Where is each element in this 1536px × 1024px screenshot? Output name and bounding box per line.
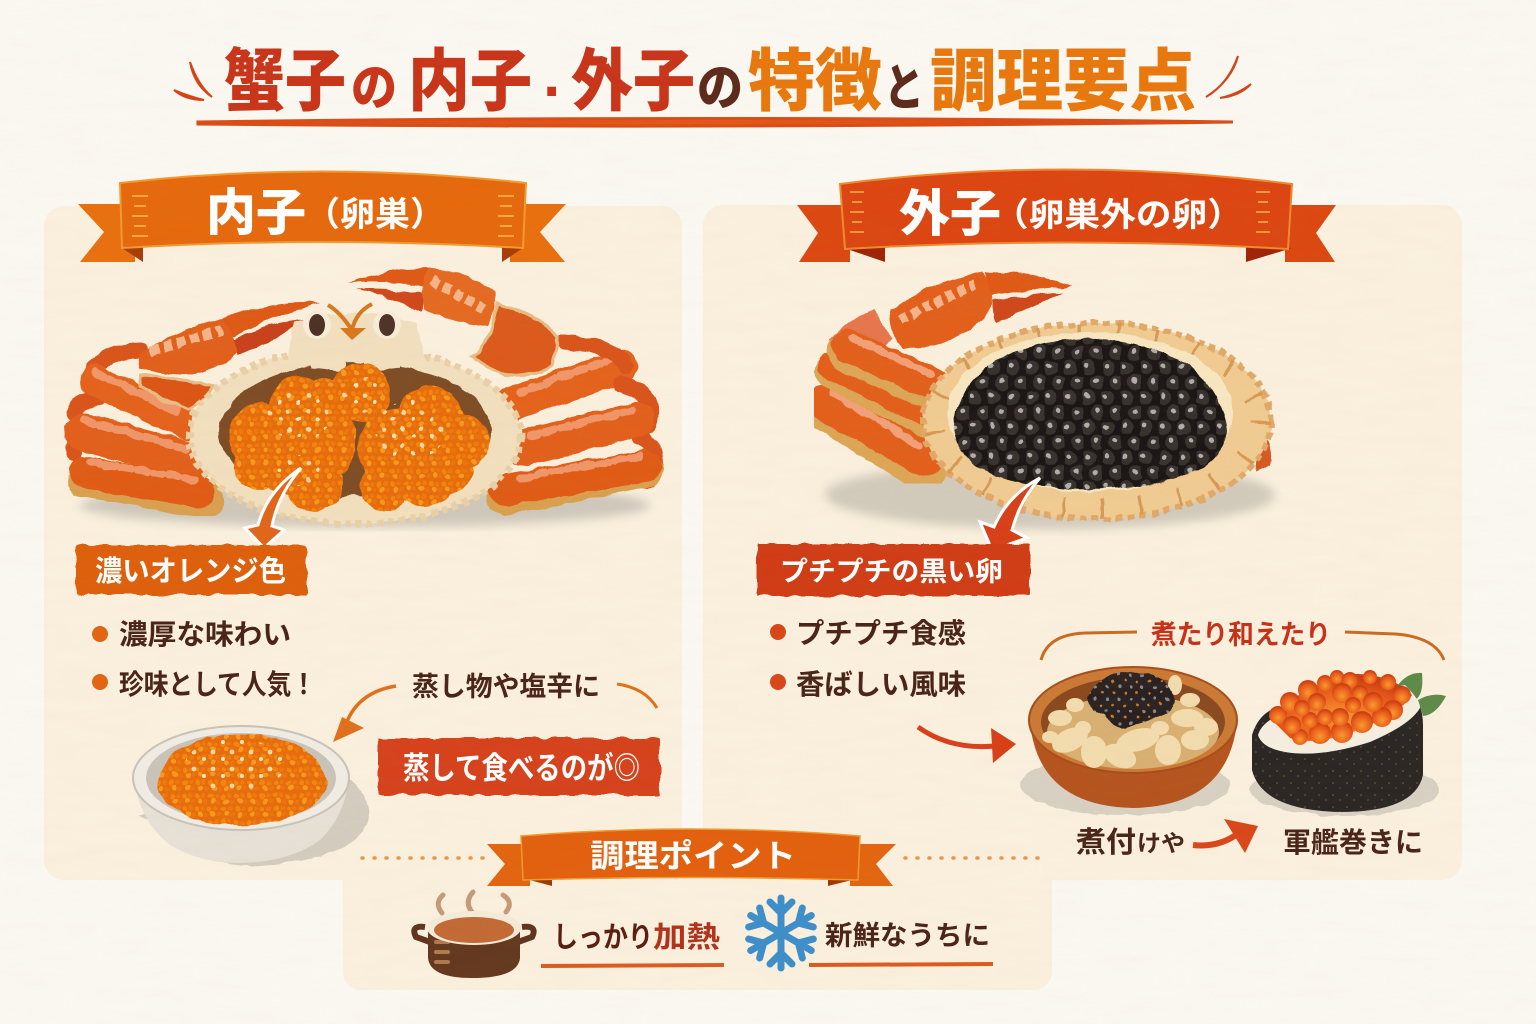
banner: 蒸して食べるのが◎: 蒸して食べるのが◎ <box>403 751 640 786</box>
label: 煮たり和えたり with bracket: 煮たり和えたり <box>1151 620 1331 650</box>
claw <box>830 272 1072 348</box>
dotted line left <box>362 856 486 860</box>
illustration: crab with orange roe <box>74 268 654 548</box>
bullets: inner roe <box>92 619 316 700</box>
icon: pot <box>414 892 534 978</box>
orange roe <box>229 363 490 511</box>
legs <box>825 338 935 470</box>
label: 煮付けや <box>1076 826 1185 859</box>
illustration: crab with black roe <box>825 272 1275 550</box>
beans <box>1042 675 1218 773</box>
illustration: bowl of orange roe <box>133 726 369 866</box>
ribbon: 調理ポイント <box>487 829 896 886</box>
bullets: outer roe: プチプチ食感 <box>796 618 966 649</box>
title text: · <box>543 57 564 126</box>
panel: left 内子 <box>44 206 682 880</box>
title text: と <box>884 60 924 116</box>
title text: 外子 <box>571 44 695 120</box>
leaves <box>1398 673 1422 700</box>
arrow to black roe <box>980 478 1040 550</box>
text: しっかり加熱: 加熱 <box>653 921 720 954</box>
tag: 濃いオレンジ色: 濃いオレンジ色 <box>95 555 286 588</box>
icon: snowflake <box>745 898 817 968</box>
arrow to orange roe <box>245 468 301 548</box>
title <box>174 44 1251 126</box>
title text: 内子 <box>408 44 532 120</box>
arrow to simmered bowl <box>918 727 1016 763</box>
title text <box>224 44 1196 126</box>
label: 煮たり和えたり with bracket <box>1041 620 1444 660</box>
bullets: outer roe: 香ばしい風味 <box>796 669 966 700</box>
tag: 濃いオレンジ色 <box>76 545 307 595</box>
text: 新鮮なうちに: 新鮮なうちに <box>825 921 990 951</box>
panel: cooking points <box>343 838 1052 990</box>
text: しっかり加熱 <box>541 921 724 966</box>
title text: 蟹子 <box>224 44 346 120</box>
arrow between dishes <box>1193 819 1258 853</box>
crab shadow <box>80 483 650 527</box>
ribbon: 外子 heading: 外子 <box>899 186 1001 242</box>
shell shadow <box>825 461 1275 529</box>
right claw <box>348 268 558 376</box>
title text: の <box>351 60 397 116</box>
bullets: inner roe: 珍味として人気！ <box>119 669 316 700</box>
black roe topping <box>1087 672 1173 728</box>
ikura <box>1269 670 1412 745</box>
crab legs <box>74 342 654 500</box>
tag: プチプチの黒い卵 <box>757 544 1030 596</box>
black roe <box>953 338 1227 489</box>
title flourishes <box>174 56 1251 100</box>
title text: 調理要点 <box>930 44 1196 120</box>
label: 煮付けや: 煮付 <box>1076 826 1136 859</box>
tag: プチプチの黒い卵: プチプチの黒い卵 <box>780 557 1003 587</box>
banner: 蒸して食べるのが◎ <box>378 738 660 795</box>
crab face <box>303 304 401 340</box>
text: しっかり加熱: しっかり <box>553 922 653 954</box>
title text: 特徴 <box>748 44 882 120</box>
title text: の <box>697 60 743 116</box>
dotted line right <box>905 856 1048 860</box>
illustration: gunkan sushi <box>1250 670 1446 816</box>
ribbon: 内子 heading <box>78 172 566 262</box>
label: 蒸し物や塩辛に with arrow: 蒸し物や塩辛に <box>412 672 600 702</box>
label: 煮付けや: けや <box>1137 830 1185 856</box>
shell <box>923 323 1272 519</box>
crab shell <box>189 314 521 524</box>
illustration: simmered bowl <box>1020 667 1237 815</box>
label: 軍艦巻きに: 軍艦巻きに <box>1283 827 1423 858</box>
left claw <box>137 302 319 410</box>
ribbon: 調理ポイント: 調理ポイント <box>590 838 796 874</box>
ribbon: 内子 heading: （卵巣） <box>305 196 445 234</box>
ribbon: 内子 heading: 内子 <box>206 185 306 241</box>
bullets: inner roe: 濃厚な味わい <box>119 619 291 650</box>
bullets: outer roe <box>770 618 966 700</box>
ribbon: 外子 heading: （卵巣外の卵） <box>993 196 1243 233</box>
label: 蒸し物や塩辛に with arrow <box>333 672 657 742</box>
panel: right 外子 <box>703 205 1462 880</box>
title underline <box>198 118 1233 126</box>
ribbon: 外子 heading <box>797 170 1336 262</box>
